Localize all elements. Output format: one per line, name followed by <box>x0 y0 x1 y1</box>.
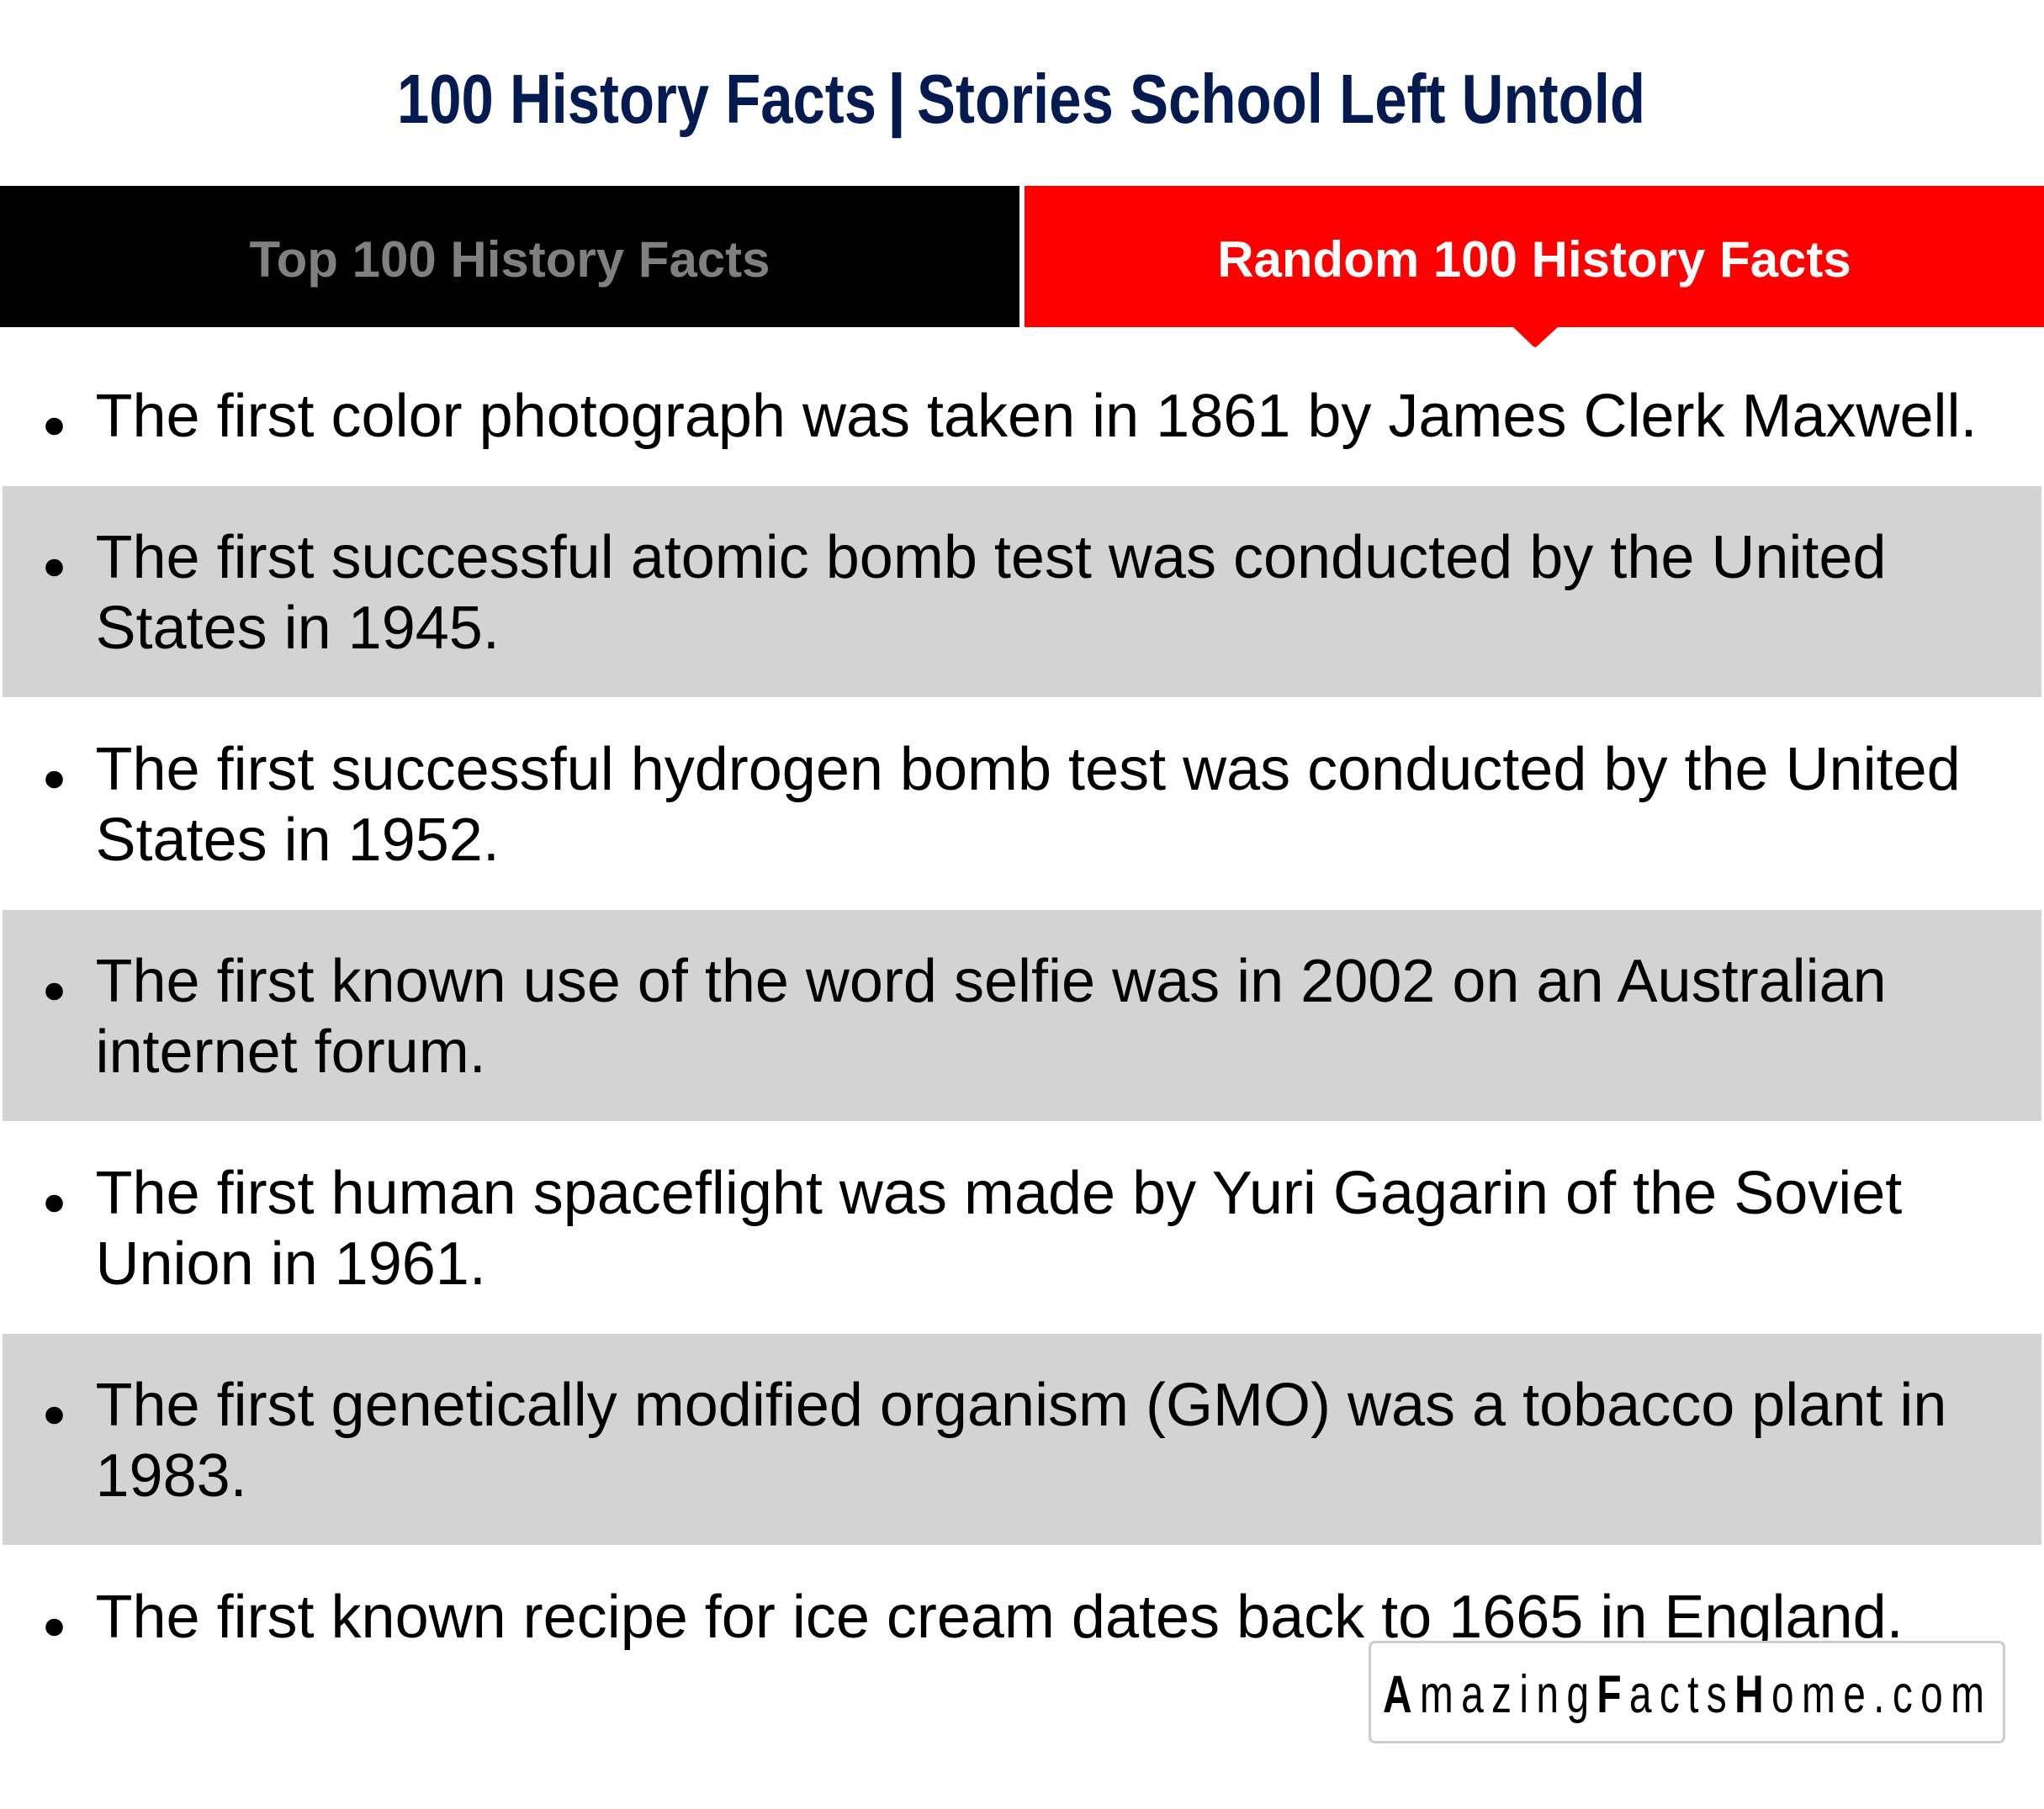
fact row 4 <box>3 910 2041 1121</box>
fact row 3: The first successful hydrogen bomb test was conducted by the United <box>96 736 1961 803</box>
tab: Top 100 History Facts: Top 100 History Facts <box>249 231 770 288</box>
fact row 5 <box>45 1160 1902 1298</box>
title: | <box>887 60 907 139</box>
fact row 5: Union in 1961. <box>96 1230 486 1298</box>
title: Stories School Left Untold <box>917 60 1645 138</box>
fact row 7: The first known recipe for ice cream dates back to 1665 in England. <box>96 1584 1904 1651</box>
watermark: AmazingFactsHome.com <box>1369 1642 2004 1743</box>
fact row 2 <box>3 486 2041 697</box>
title: 100 History Facts <box>397 60 876 138</box>
fact row 1: The first color photograph was taken in 1861 by James Clerk Maxwell. <box>96 383 1978 450</box>
fact row 6: The first genetically modified organism (GMO) was a tobacco plant in <box>96 1372 1946 1439</box>
fact row 4: The first known use of the word selfie was in 2002 on an Australian <box>96 948 1887 1015</box>
tab: Random 100 History Facts: Random 100 History Facts <box>1217 231 1851 288</box>
fact row 6: 1983. <box>96 1442 247 1510</box>
fact row 6 <box>3 1334 2041 1545</box>
fact row 3: States in 1952. <box>96 807 500 874</box>
fact row 2: States in 1945. <box>96 595 500 662</box>
tab: Top 100 History Facts <box>0 186 1019 327</box>
fact row 2: The first successful atomic bomb test was conducted by the United <box>96 524 1886 591</box>
fact row 5: The first human spaceflight was made by Yuri Gagarin of the Soviet <box>96 1160 1902 1227</box>
tab: Random 100 History Facts <box>1025 186 2044 347</box>
fact row 3 <box>45 736 1961 874</box>
watermark: AmazingFactsHome.com: AmazingFactsHome.com <box>1383 1664 1992 1724</box>
fact row 4: internet forum. <box>96 1018 486 1086</box>
title <box>397 60 1645 139</box>
